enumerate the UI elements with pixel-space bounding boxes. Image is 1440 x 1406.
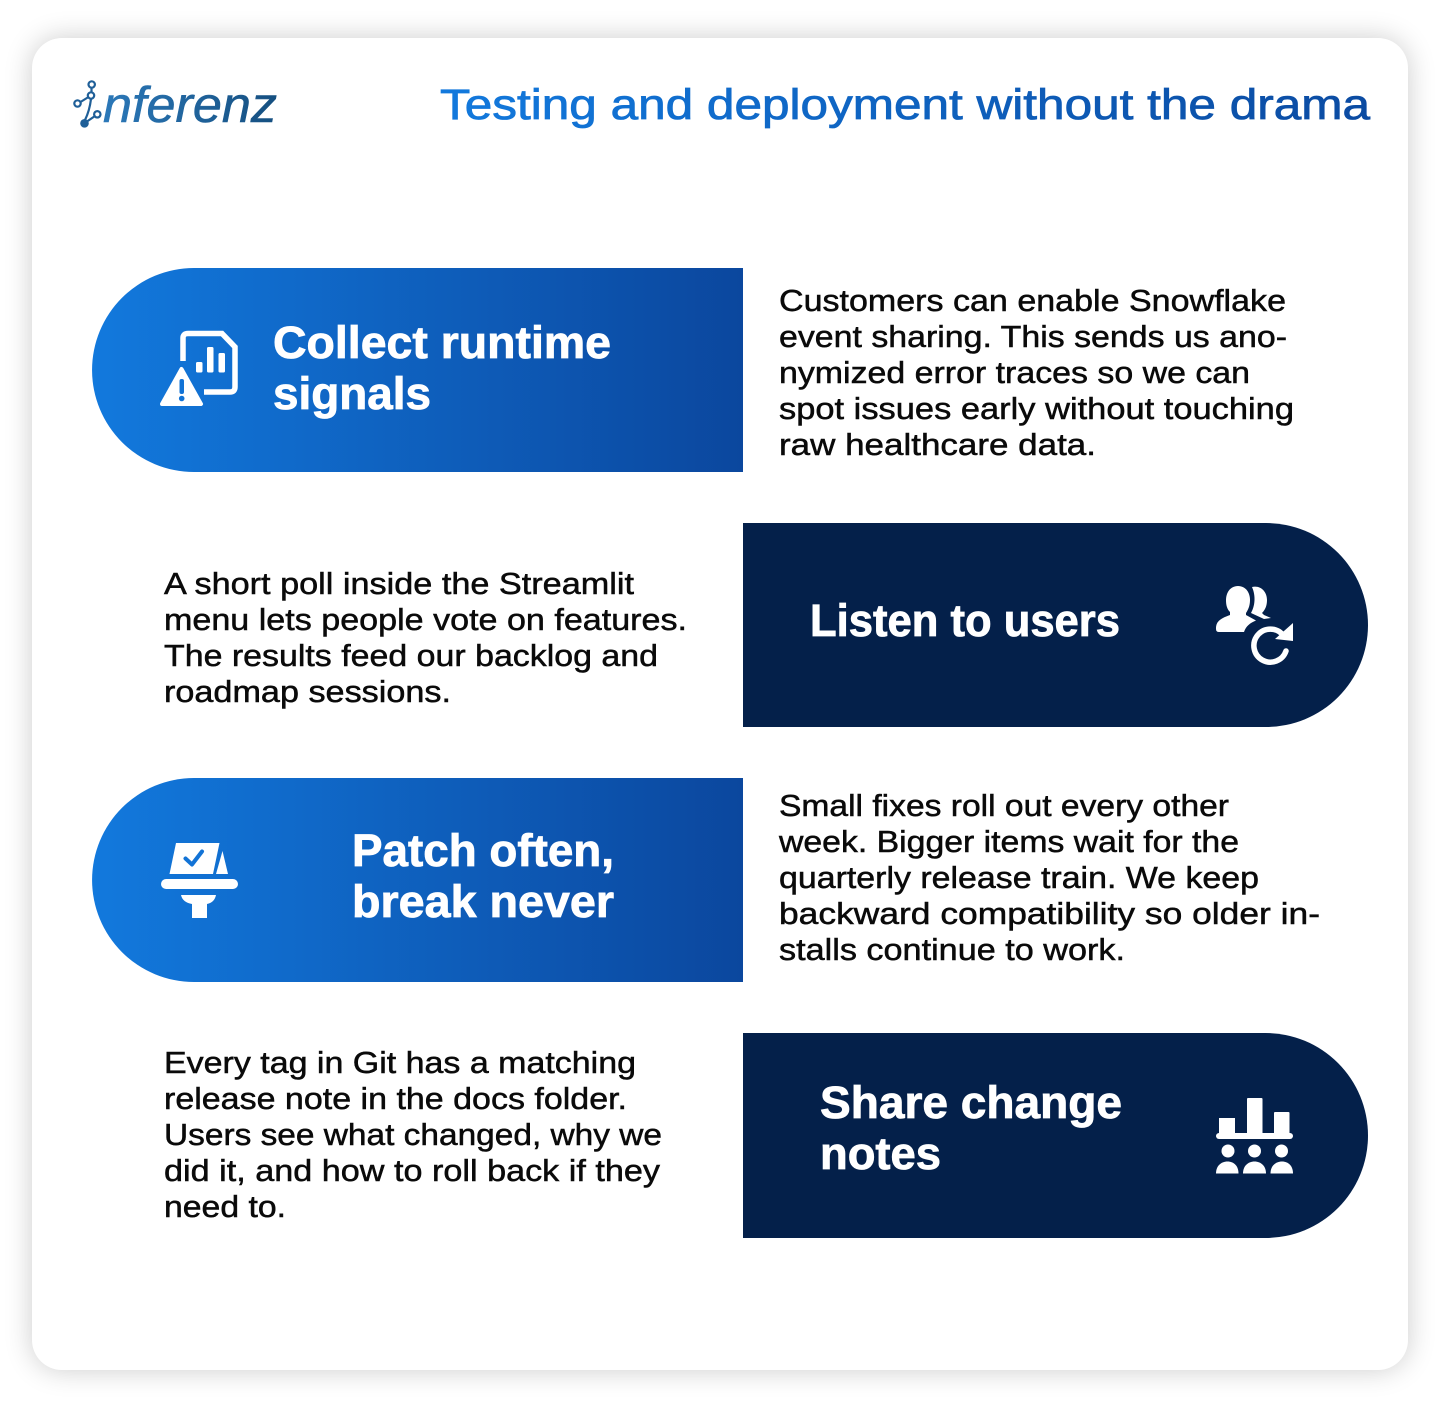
pill background 2 (743, 523, 1368, 727)
icon: users with refresh (1216, 586, 1293, 662)
text: share change notes description: Every tag in Git has a matching (164, 1045, 636, 1080)
heading: share change notes (820, 1077, 1122, 1179)
heading: collect runtime signals (273, 317, 611, 419)
icon: document chart with warning (162, 334, 235, 404)
text: share change notes description (164, 1045, 662, 1224)
text: listen to users description: A short poll inside the Streamlit (164, 566, 634, 601)
text: patch often description: stalls continue to work. (779, 932, 1125, 967)
title: Testing and deployment without the drama (440, 81, 1370, 129)
text: collect runtime description: event sharing. This sends us ano- (779, 319, 1287, 354)
text: share change notes description: need to. (164, 1189, 286, 1224)
text: collect runtime description: nymized error traces so we can (779, 355, 1250, 390)
text: share change notes description: did it, and how to roll back if they (164, 1153, 661, 1188)
text: collect runtime description: Customers can enable Snowflake (779, 283, 1286, 318)
icon: ballot box with check (161, 843, 238, 918)
heading: patch often break never: break never (352, 876, 614, 927)
text: listen to users description: roadmap sessions. (164, 674, 451, 709)
pill background 4 (743, 1033, 1368, 1238)
panel: patch often (92, 778, 743, 982)
text: patch often description: Small fixes roll out every other (779, 788, 1229, 823)
heading: share change notes: notes (820, 1128, 941, 1179)
text: listen to users description: menu lets people vote on features. (164, 602, 687, 637)
heading: patch often break never (352, 825, 614, 927)
panel: collect runtime signals (92, 268, 743, 472)
pill background 1 (92, 268, 743, 472)
panel: listen to users (743, 523, 1368, 727)
heading: listen to users: Listen to users (810, 595, 1120, 646)
text: collect runtime description (779, 283, 1294, 462)
heading: patch often break never: Patch often, (352, 825, 614, 876)
pill background 3 (92, 778, 743, 982)
text: collect runtime description: spot issues early without touching (779, 391, 1294, 426)
icon: audience with bar chart (1216, 1098, 1293, 1174)
heading: collect runtime signals: Collect runtime (273, 317, 611, 368)
heading: collect runtime signals: signals (273, 368, 431, 419)
text: patch often description: week. Bigger items wait for the (778, 824, 1239, 859)
heading: share change notes: Share change (820, 1077, 1122, 1128)
text: share change notes description: Users see what changed, why we (164, 1117, 662, 1152)
text: patch often description: quarterly release train. We keep (779, 860, 1259, 895)
text: listen to users description: The results feed our backlog and (164, 638, 658, 673)
panel: share change notes (743, 1033, 1368, 1238)
text: patch often description: backward compatibility so older in- (779, 896, 1320, 931)
logo: inferenz: nferenz (103, 77, 277, 133)
text: listen to users description (164, 566, 687, 709)
text: collect runtime description: raw healthcare data. (779, 427, 1096, 462)
text: patch often description (778, 788, 1320, 967)
text: share change notes description: release note in the docs folder. (164, 1081, 627, 1116)
